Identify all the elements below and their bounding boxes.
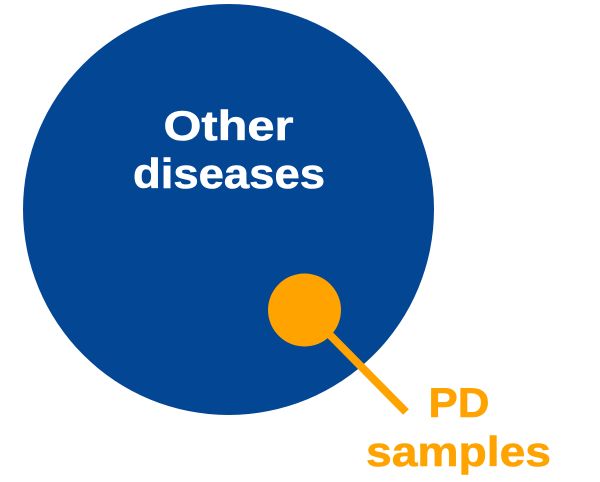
label: PD samples: PD [428,379,490,426]
label: other diseases [133,102,325,197]
label: other diseases: Other [164,102,294,149]
circle: other diseases [23,4,434,415]
circle: PD samples [268,274,341,346]
label: PD samples [366,379,551,475]
label: other diseases: diseases [133,150,325,197]
pointer line [330,335,406,412]
label: PD samples: samples [366,428,551,475]
